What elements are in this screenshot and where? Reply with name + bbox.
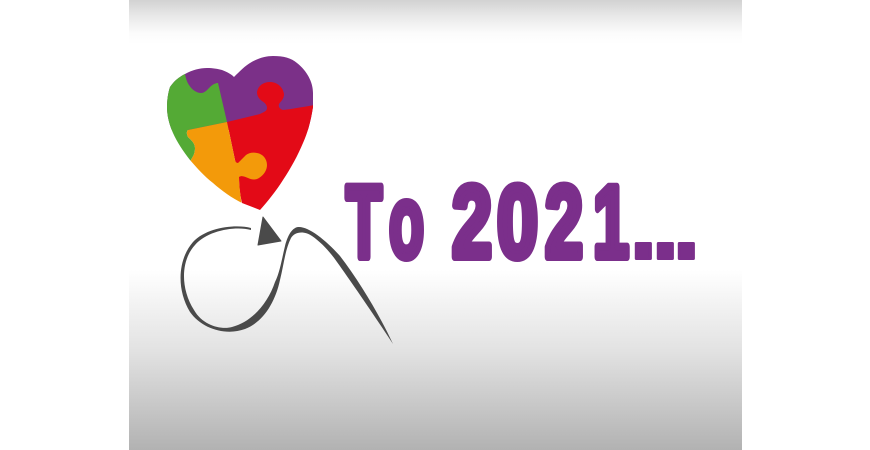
year: 2021: 1 — [593, 165, 629, 279]
ellipsis dots — [630, 168, 700, 280]
balloon string — [181, 226, 393, 344]
puzzle piece: green — [167, 74, 227, 161]
icon: puzzle heart — [167, 56, 313, 210]
ellipsis dots: . — [672, 168, 700, 280]
puzzle piece: orange — [187, 122, 267, 207]
year: 2021: 0 — [497, 165, 538, 279]
ellipsis dots: . — [652, 168, 679, 280]
icon: looping string — [181, 217, 393, 344]
word: To: o — [389, 165, 424, 279]
background panel — [129, 0, 742, 450]
year: 2021 — [452, 165, 629, 279]
ellipsis dots: . — [630, 168, 657, 280]
year: 2021: 2 — [545, 165, 583, 279]
puzzle piece: purple — [167, 56, 313, 130]
year: 2021: 2 — [452, 165, 492, 279]
puzzle piece: red — [227, 82, 313, 210]
arrowhead — [258, 217, 281, 245]
title: To 2021... — [346, 165, 700, 280]
word: To: T — [346, 165, 382, 279]
